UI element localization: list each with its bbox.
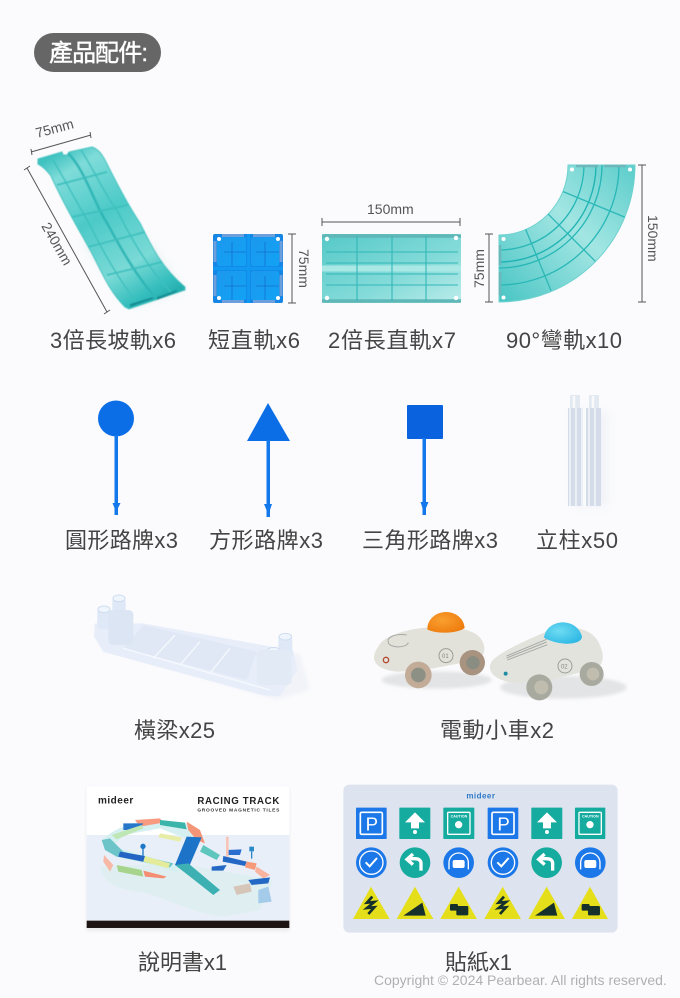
icon: circular road sign [98, 400, 134, 515]
row: triangle signs [353, 887, 608, 919]
dimension: slope track length 240mm: 240mm [38, 220, 76, 268]
manual track illustration [100, 818, 273, 917]
slope track piece [38, 147, 185, 309]
dimension: long track 150mm: 150mm [367, 201, 414, 217]
labels: track pieces: 2倍長直軌x7 [328, 328, 456, 353]
short track piece [213, 234, 283, 303]
item: short straight track [213, 234, 312, 303]
dimension: short track 75mm: 75mm [296, 249, 312, 288]
dimension: slope track length 240mm [24, 166, 110, 314]
icon: clear pillars [568, 395, 607, 506]
instruction manual [87, 787, 289, 931]
orange car 01 [374, 612, 485, 688]
dimension: curve track 75mm [471, 234, 493, 302]
row: square signs: P [366, 813, 378, 834]
icon: square road sign [407, 405, 443, 515]
labels: track pieces: 90°彎軌x10 [506, 328, 622, 353]
row: square signs: CAUTION [582, 815, 599, 819]
blue car 02 [490, 622, 604, 700]
item: 3x long slope track [24, 115, 185, 314]
dimension: curve track 75mm: 75mm [471, 249, 487, 288]
row: round signs [356, 847, 606, 878]
labels: track pieces: 3倍長坡軌x6 [50, 328, 176, 353]
manual subtitle: GROOVED MAGNETIC TILES [197, 807, 280, 813]
labels: track pieces: 短直軌x6 [208, 328, 300, 353]
sticker sheet [343, 785, 618, 933]
dimension: slope track width 75mm: 75mm [34, 115, 75, 141]
long track piece [322, 234, 461, 303]
dimension: curve track 150mm: 150mm [645, 215, 661, 262]
labels: beam and cars: 橫梁x25 [134, 718, 215, 743]
labels: track pieces [50, 328, 622, 353]
blue car 02: 02 [561, 664, 568, 670]
manual logo: mideer [98, 796, 133, 807]
row: square signs [356, 808, 605, 839]
manual title: RACING TRACK [197, 796, 279, 807]
labels: signs and pillars: 立柱x50 [536, 528, 618, 553]
orange car 01: 01 [442, 654, 449, 660]
labels: signs and pillars: 圓形路牌x3 [65, 528, 178, 553]
dimension: slope track width 75mm [31, 115, 91, 155]
labels: manual and stickers: 說明書x1 [138, 950, 227, 975]
copyright notice: Copyright © 2024 Pearbear. All rights reserved. [374, 972, 667, 988]
labels: manual and stickers: 貼紙x1 [445, 950, 512, 975]
labels: signs and pillars: 方形路牌x3 [209, 528, 323, 553]
icon: triangular road sign [247, 403, 290, 517]
item: 90 degree curve track [471, 165, 661, 302]
curve track piece [499, 165, 635, 302]
row: square signs: P [497, 813, 510, 834]
beam piece [94, 595, 310, 700]
toy cars [374, 612, 627, 700]
labels: signs and pillars: 三角形路牌x3 [362, 528, 498, 553]
labels: beam and cars [134, 718, 554, 743]
heading pill: product accessories [34, 33, 161, 72]
dimension: curve track 150mm [638, 165, 661, 302]
labels: manual and stickers [138, 950, 512, 975]
row: square signs: CAUTION [451, 815, 468, 819]
item: 2x long straight track [322, 201, 461, 303]
heading pill: product accessories: 產品配件: [49, 40, 148, 67]
sticker sheet logo: mideer [466, 792, 495, 801]
labels: signs and pillars [65, 528, 618, 553]
car shadows [382, 671, 627, 699]
labels: beam and cars: 電動小車x2 [440, 718, 554, 743]
